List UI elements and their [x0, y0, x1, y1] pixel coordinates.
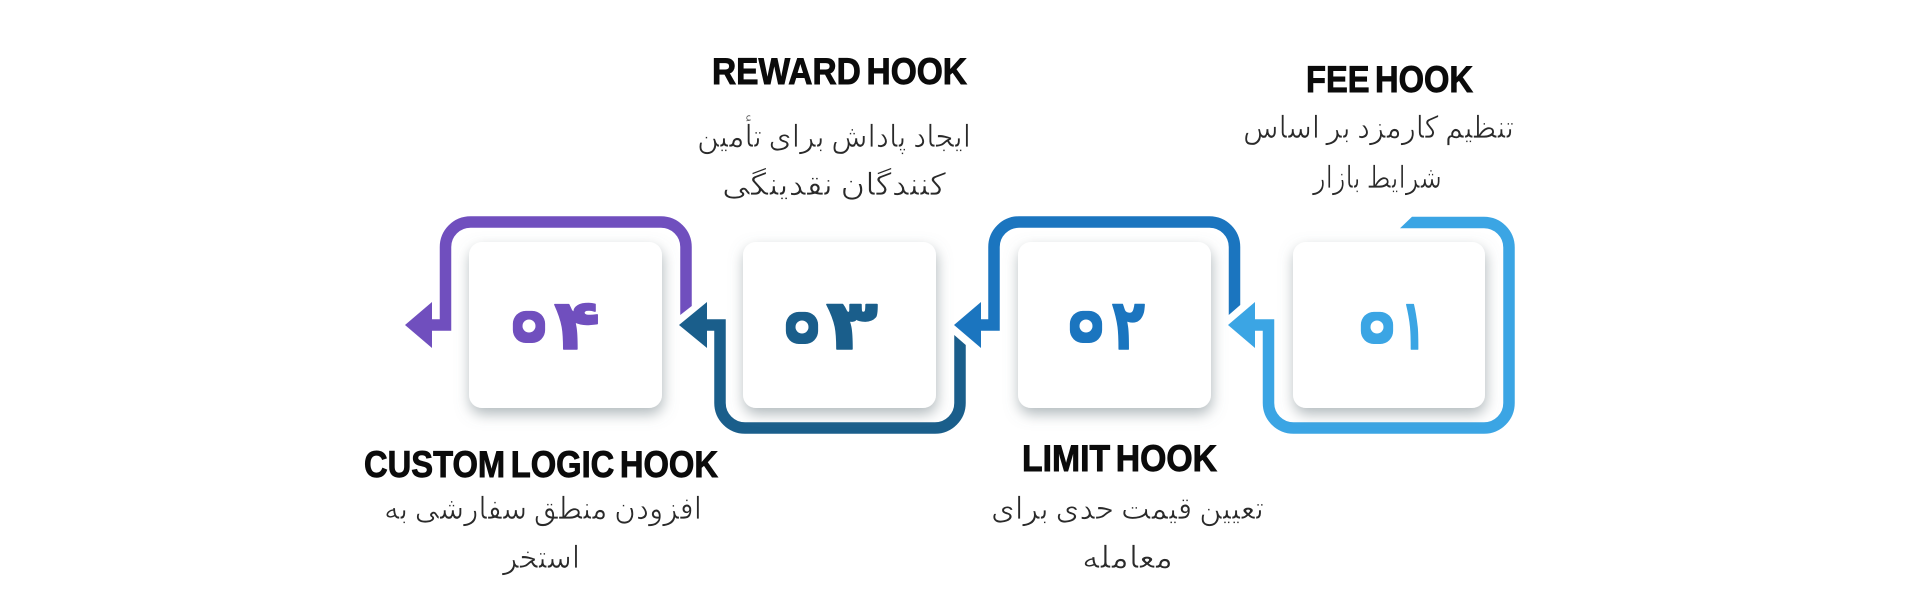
step 1 text: Fee Hook: [1243, 59, 1514, 196]
number 03: ۰: [791, 306, 813, 347]
description: [1243, 110, 1514, 196]
card 3: [743, 242, 936, 408]
arrow 1: light blue connector: [1228, 217, 1509, 428]
number 01: [1366, 284, 1425, 366]
description: افزودن منطق سفارشی به: [384, 491, 702, 527]
description: تعیین قیمت حدی برای: [991, 491, 1264, 527]
number 02: ۲: [1112, 284, 1145, 366]
heading: FEE HOOK: [1306, 59, 1473, 100]
description: [991, 491, 1264, 576]
arrow 2: blue connector: [954, 222, 1240, 348]
heading: LIMIT HOOK: [1022, 438, 1217, 479]
description: [384, 491, 702, 576]
number 02: ۰: [1075, 305, 1097, 346]
heading: REWARD HOOK: [712, 51, 967, 92]
step 4 text: Custom Logic Hook: [364, 444, 718, 576]
description: استخر: [501, 540, 580, 576]
step 3 text: Reward Hook: [697, 51, 971, 203]
number 01: ۰: [1366, 306, 1388, 347]
step 2 text: Limit Hook: [991, 438, 1264, 576]
description: کنندگان نقدینگی: [722, 167, 946, 203]
card 4: [469, 242, 662, 408]
arrow 4: purple connector: [405, 222, 692, 348]
heading: CUSTOM LOGIC HOOK: [364, 444, 718, 485]
number 04: ۰: [518, 305, 540, 346]
number 02: [1075, 284, 1145, 366]
description: تنظیم کارمزد بر اساس: [1243, 110, 1514, 146]
number 04: [518, 284, 600, 366]
card 2: [1018, 242, 1211, 408]
description: معامله: [1082, 540, 1173, 576]
description: شرایط بازار: [1311, 160, 1442, 196]
number 03: [791, 284, 878, 366]
description: [697, 115, 971, 203]
number 04: ۴: [554, 284, 600, 366]
number 01: ۱: [1401, 284, 1425, 366]
arrow 3: navy connector: [679, 302, 966, 428]
number 03: ۳: [826, 284, 878, 366]
description: ایجاد پاداش برای تأمین: [697, 115, 971, 155]
card 1: [1293, 242, 1485, 408]
